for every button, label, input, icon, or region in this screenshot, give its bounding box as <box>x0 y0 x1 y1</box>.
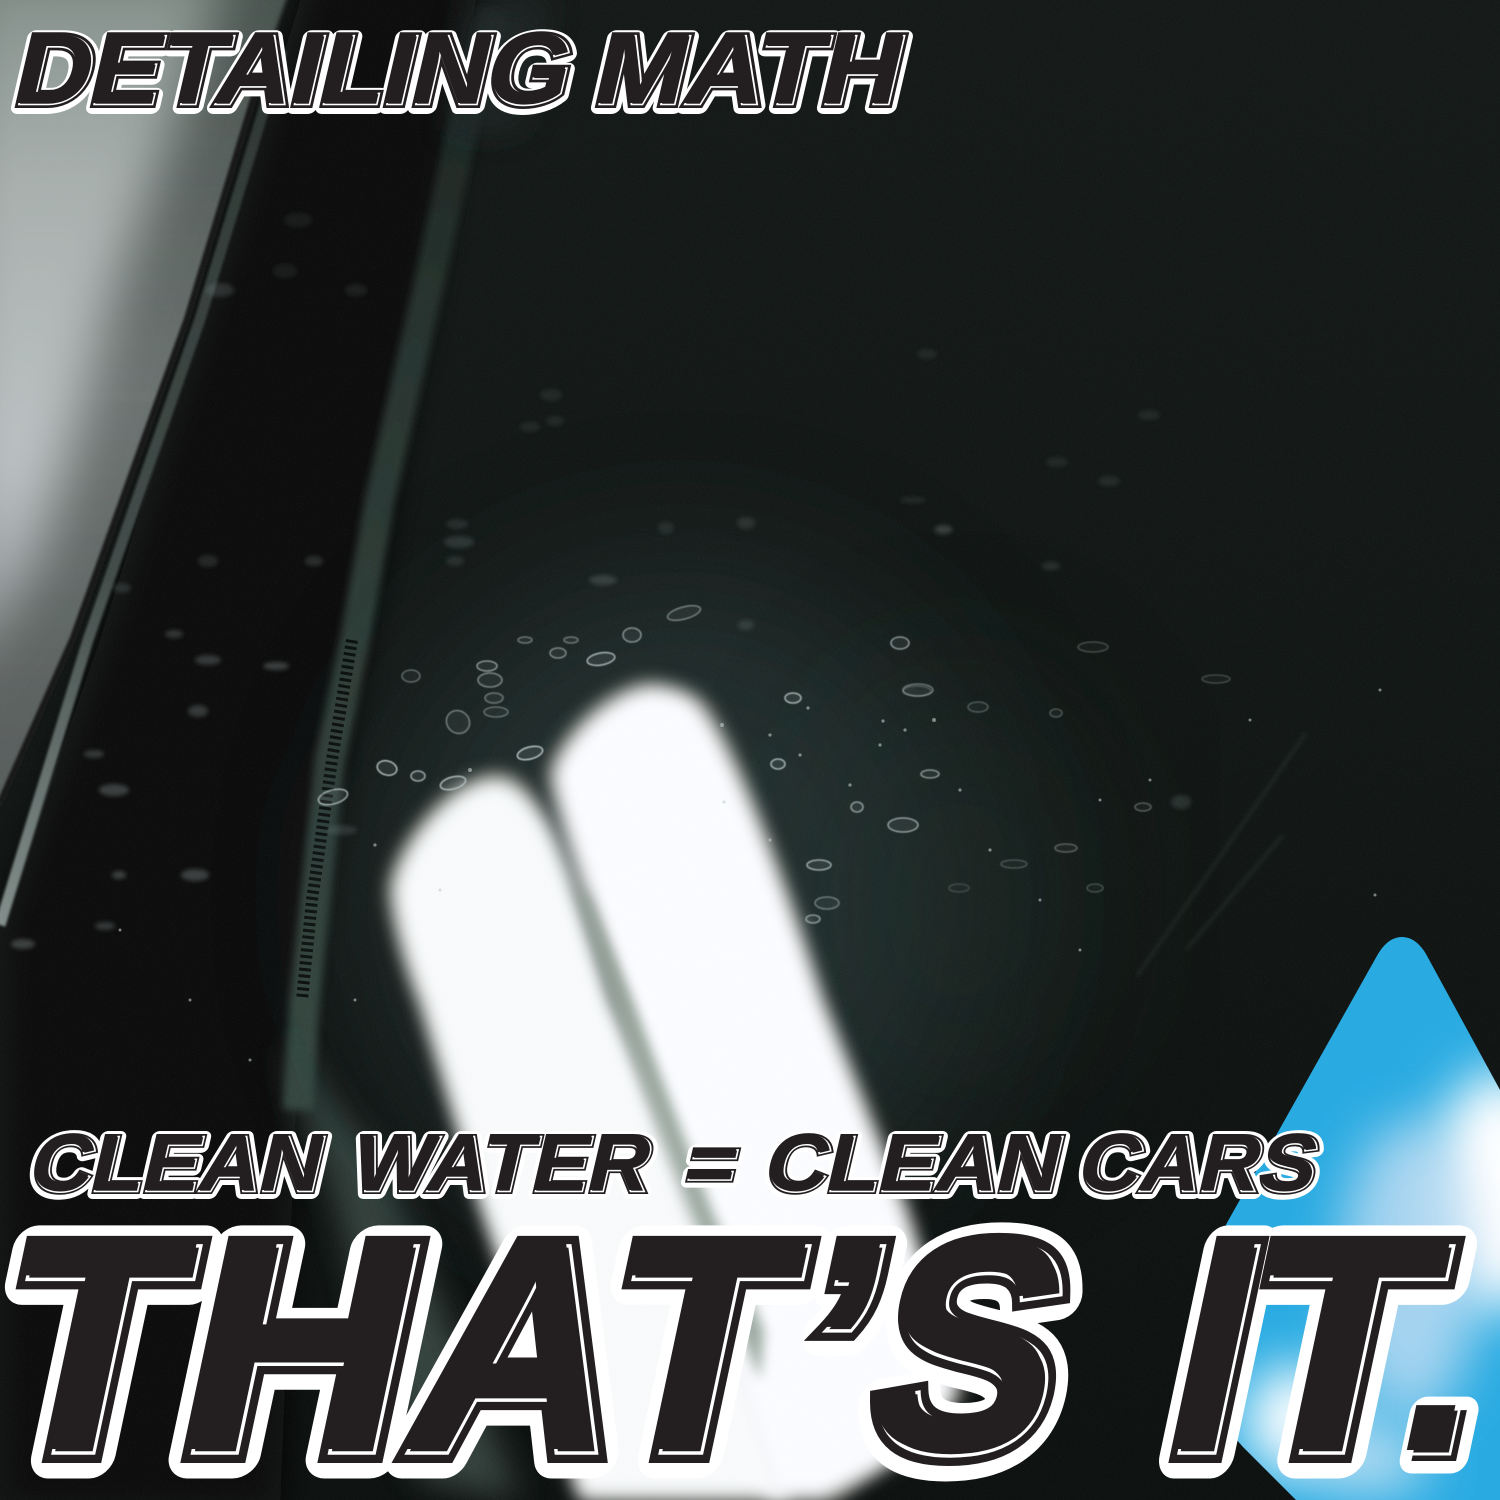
faint scratches, lower right <box>1137 733 1306 976</box>
subheading: CLEAN WATER = CLEAN CARS: WATER <box>346 1120 662 1209</box>
light bars <box>388 680 965 1500</box>
subheading: CLEAN WATER = CLEAN CARS: CLEAN <box>759 1120 1072 1209</box>
subheading: CLEAN WATER = CLEAN CARS: CLEAN <box>24 1121 334 1210</box>
bright specks <box>118 688 1382 1062</box>
subheading: CLEAN WATER = CLEAN CARS: CARS <box>1073 1120 1328 1209</box>
heading: DETAILING MATH: DETAILING <box>7 15 586 126</box>
heading: DETAILING MATH: MATH <box>585 13 915 125</box>
subheading: CLEAN WATER = CLEAN CARS: CARS <box>1071 1119 1327 1208</box>
water spots <box>317 603 1230 923</box>
heading: DETAILING MATH: MATH <box>587 15 917 126</box>
subheading: CLEAN WATER = CLEAN CARS: = <box>676 1119 747 1208</box>
heading: DETAILING MATH: MATH <box>587 15 917 126</box>
subheading: CLEAN WATER = CLEAN CARS: = <box>678 1120 748 1209</box>
subheading: CLEAN WATER = CLEAN CARS <box>22 1119 1328 1210</box>
subheading: CLEAN WATER = CLEAN CARS: WATER <box>346 1120 662 1209</box>
subheading: CLEAN WATER = CLEAN CARS: CLEAN <box>24 1120 334 1209</box>
heading: DETAILING MATH <box>5 13 917 128</box>
dark band between wall and trim <box>0 0 480 1500</box>
subheading: CLEAN WATER = CLEAN CARS: CLEAN <box>757 1119 1071 1208</box>
subheading: CLEAN WATER = CLEAN CARS: CARS <box>1073 1120 1328 1209</box>
icon: water drop <box>1201 937 1500 1500</box>
subheading: CLEAN WATER = CLEAN CARS: CARS <box>1073 1121 1328 1210</box>
blurred water marks <box>11 213 1191 949</box>
heading: DETAILING MATH: DETAILING <box>5 13 584 125</box>
soft haze around light bars <box>380 580 1090 1220</box>
light wall reflection, upper left <box>0 0 300 925</box>
headline: THAT'S IT. <box>0 1176 1500 1500</box>
heading: DETAILING MATH: MATH <box>587 17 917 128</box>
heading: DETAILING MATH: DETAILING <box>7 17 586 128</box>
subheading: CLEAN WATER = CLEAN CARS: = <box>678 1121 748 1210</box>
green trim strip <box>291 0 550 1500</box>
subheading: CLEAN WATER = CLEAN CARS: WATER <box>344 1119 661 1208</box>
subheading: CLEAN WATER = CLEAN CARS: CLEAN <box>24 1120 334 1209</box>
subheading: CLEAN WATER = CLEAN CARS: = <box>678 1120 748 1209</box>
heading: DETAILING MATH: DETAILING <box>7 15 586 126</box>
subheading: CLEAN WATER = CLEAN CARS: CLEAN <box>22 1119 333 1208</box>
subheading: CLEAN WATER = CLEAN CARS: CLEAN <box>759 1121 1072 1210</box>
subheading: CLEAN WATER = CLEAN CARS: CLEAN <box>759 1120 1072 1209</box>
zigzag seal pattern <box>302 640 352 1000</box>
subheading: CLEAN WATER = CLEAN CARS: WATER <box>346 1121 662 1210</box>
